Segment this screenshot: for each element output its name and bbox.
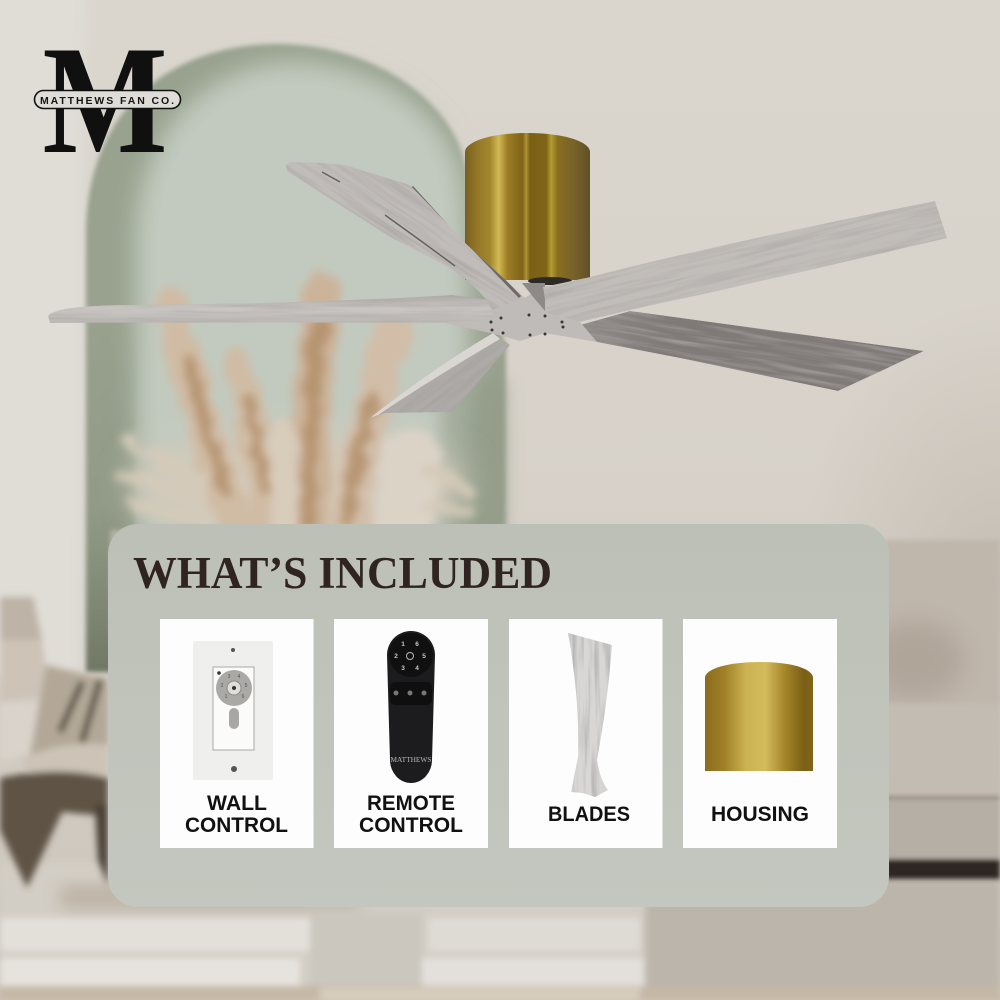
label: wall control: CONTROL bbox=[185, 814, 288, 837]
label: wall control bbox=[185, 792, 288, 837]
icon: remote control: 4 bbox=[415, 665, 419, 672]
pampas pale mass bbox=[135, 435, 465, 535]
heading: WHAT’S INCLUDED bbox=[133, 548, 552, 598]
panel: what's included bbox=[108, 524, 889, 907]
upper left blade bbox=[286, 162, 524, 310]
icon: wall control: 6 bbox=[242, 694, 245, 700]
icon: wall control: 4 bbox=[238, 674, 241, 680]
logo name: MATTHEWS FAN CO. bbox=[40, 95, 174, 107]
label: blades: BLADES bbox=[548, 803, 630, 826]
icon: remote control: 2 bbox=[394, 653, 398, 660]
logo monogram M: M bbox=[42, 14, 168, 186]
logo bbox=[34, 14, 180, 186]
upper right blade bbox=[543, 201, 947, 322]
icon: blade bbox=[568, 633, 612, 797]
icon: wall control: 3 bbox=[228, 674, 231, 680]
housing underside shadow bbox=[528, 277, 572, 285]
icon: remote control: 6 bbox=[415, 641, 419, 648]
icon: remote control: 5 bbox=[422, 653, 426, 660]
card: housing bbox=[683, 619, 837, 848]
lower right blade bbox=[582, 311, 924, 391]
pampas plumes bbox=[120, 290, 470, 525]
label: remote control: REMOTE bbox=[367, 792, 455, 815]
icon: wall control: 1 bbox=[225, 694, 228, 700]
label: housing: HOUSING bbox=[711, 803, 809, 826]
card: remote control bbox=[334, 619, 488, 848]
label: wall control: WALL bbox=[207, 792, 267, 815]
card: wall control bbox=[160, 619, 314, 848]
icon: housing bbox=[705, 662, 813, 771]
left blade bbox=[48, 295, 493, 323]
right sofa bbox=[865, 540, 1000, 879]
mounting screws bbox=[490, 314, 564, 336]
blurred pampas grass bbox=[120, 290, 470, 535]
pampas dark cores bbox=[188, 325, 372, 520]
left armchair with throw bbox=[0, 597, 108, 888]
icon: wall control: 2 bbox=[221, 683, 224, 689]
logo name plate bbox=[34, 90, 180, 108]
icon: wall control bbox=[193, 641, 273, 780]
icon: remote control: MATTHEWS bbox=[390, 755, 432, 764]
arched wall niche bbox=[86, 44, 506, 672]
icon: wall control: 5 bbox=[245, 683, 248, 689]
ceiling fan bbox=[40, 82, 983, 496]
label: remote control: CONTROL bbox=[359, 814, 463, 837]
blade hub bbox=[440, 285, 597, 342]
fan housing bbox=[465, 133, 590, 280]
icon: remote control bbox=[387, 631, 435, 783]
lower left blade bbox=[370, 334, 510, 418]
icon: remote control: 3 bbox=[401, 665, 405, 672]
label: remote control bbox=[359, 792, 463, 837]
floor bbox=[0, 862, 1000, 1000]
card: blades bbox=[509, 619, 662, 848]
icon: remote control: 1 bbox=[401, 641, 405, 648]
